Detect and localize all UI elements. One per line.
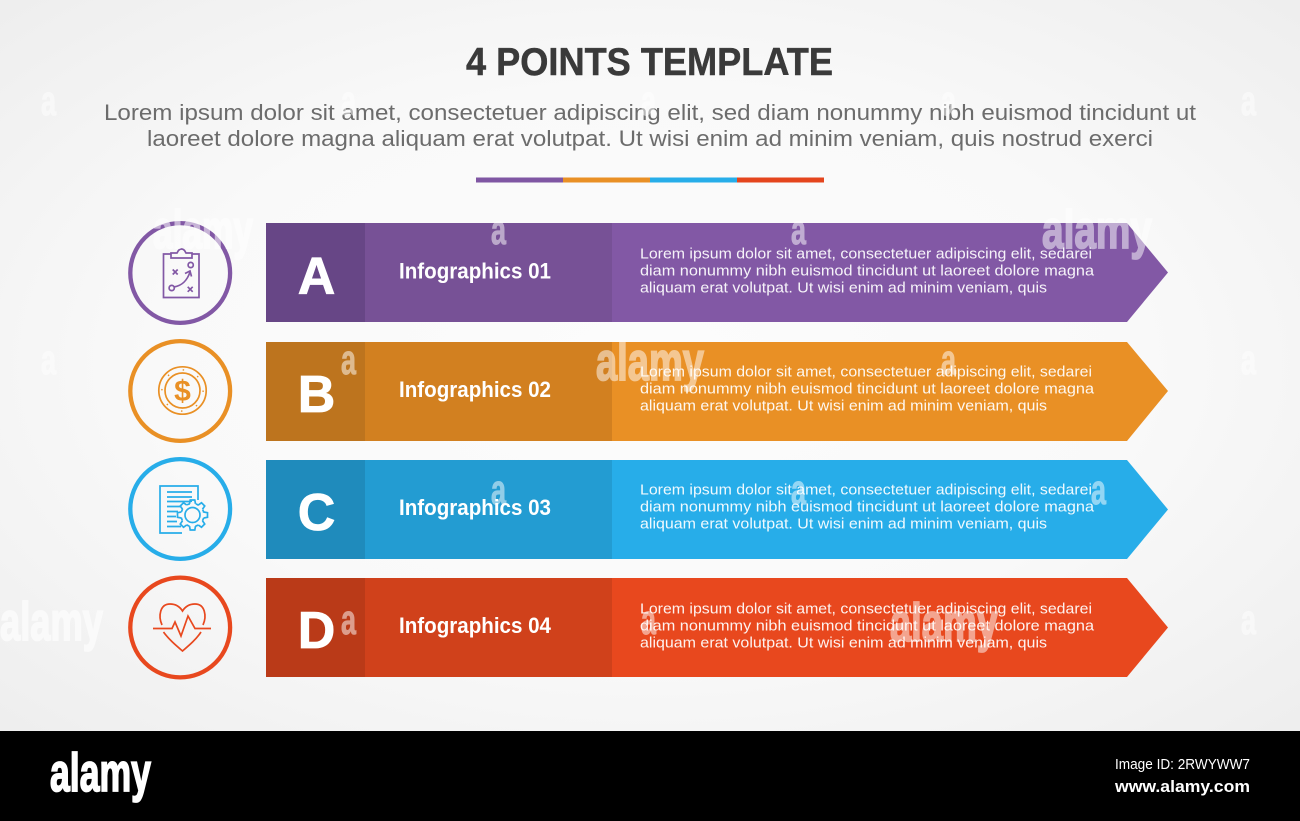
body text A: diam nonummy nibh euismod tincidunt ut laoreet dolore magna: [640, 262, 1095, 280]
panel: row D: [266, 578, 1168, 677]
heading C: Infographics 03: [399, 495, 551, 520]
label band D: [365, 578, 612, 677]
watermark overlay: a: [41, 336, 56, 383]
watermark overlay: alamy: [596, 332, 704, 392]
letter C: C: [298, 484, 335, 542]
intro text block: Lorem ipsum dolor sit amet, consectetuer adipiscing elit, sed diam nonummy nibh euismod tincidunt ut: [104, 100, 1196, 125]
letter tab C: [266, 460, 365, 559]
watermark overlay: a: [491, 206, 506, 253]
watermark overlay: a: [941, 336, 956, 383]
body text A: aliquam erat volutpat. Ut wisi enim ad minim veniam, quis: [640, 280, 1047, 296]
body text B: diam nonummy nibh euismod tincidunt ut laoreet dolore magna: [640, 380, 1095, 398]
icon circle: clipboard strategy: [130, 223, 230, 323]
body text C: Lorem ipsum dolor sit amet, consectetuer adipiscing elit, sedarei: [640, 482, 1092, 498]
title: 4 POINTS TEMPLATE: [466, 41, 833, 84]
body text B: Lorem ipsum dolor sit amet, consectetuer adipiscing elit, sedarei: [640, 364, 1092, 380]
letter tab B: [266, 342, 365, 441]
watermark overlay: a: [341, 77, 356, 124]
label band B: [365, 342, 612, 441]
heading D: Infographics 04: [399, 613, 552, 638]
watermark overlay: a: [791, 466, 806, 513]
watermark overlay: a: [1241, 336, 1256, 383]
label band A: [365, 223, 612, 322]
colour divider: [476, 178, 824, 182]
letter D: D: [298, 602, 335, 660]
body text D: Lorem ipsum dolor sit amet, consectetuer adipiscing elit, sedarei: [640, 600, 1092, 618]
body text A: [640, 246, 1095, 296]
watermark overlay: a: [941, 77, 956, 124]
body text D: aliquam erat volutpat. Ut wisi enim ad minim veniam, quis: [640, 634, 1047, 652]
heading A: Infographics 01: [399, 258, 551, 284]
icon circle: dollar coin: $: [174, 375, 191, 408]
watermark overlay: a: [641, 77, 656, 124]
footer bar: [0, 731, 1300, 821]
watermark overlay: a: [791, 206, 806, 253]
icon circle: document with gear: [130, 459, 230, 559]
body text C: diam nonummy nibh euismod tincidunt ut laoreet dolore magna: [640, 498, 1095, 516]
watermark overlay: a: [341, 596, 356, 643]
watermark overlay: a: [491, 466, 506, 513]
body text C: aliquam erat volutpat. Ut wisi enim ad minim veniam, quis: [640, 516, 1047, 532]
panel: row C: [266, 460, 1168, 559]
arrow bar A: [266, 223, 1168, 322]
footer logo: alamy: [50, 743, 151, 803]
letter tab D: [266, 578, 365, 677]
watermark overlay: a: [41, 77, 56, 124]
intro text block: [104, 100, 1196, 151]
heading B: Infographics 02: [399, 377, 551, 402]
image id: Image ID: 2RWYWW7: [1115, 756, 1250, 773]
letter B: B: [298, 366, 335, 424]
body text B: aliquam erat volutpat. Ut wisi enim ad minim veniam, quis: [640, 398, 1047, 414]
watermark overlay: a: [1241, 596, 1256, 643]
body text D: diam nonummy nibh euismod tincidunt ut laoreet dolore magna: [640, 618, 1095, 634]
panel: row A: [266, 223, 1168, 322]
watermark overlay: a: [1241, 77, 1256, 124]
website: www.alamy.com: [1114, 777, 1250, 796]
icon circle: dollar coin: [130, 341, 230, 441]
watermark overlay: a: [641, 596, 656, 643]
watermark overlay: [0, 77, 1256, 653]
body text B: [640, 364, 1095, 414]
body text A: Lorem ipsum dolor sit amet, consectetuer adipiscing elit, sedarei: [640, 246, 1092, 262]
watermark overlay: a: [1091, 466, 1106, 513]
arrow bar C: [266, 460, 1168, 559]
arrow bar B: [266, 342, 1168, 441]
letter A: A: [298, 248, 335, 306]
label band C: [365, 460, 612, 559]
watermark overlay: alamy: [153, 200, 253, 260]
arrow bar D: [266, 578, 1168, 677]
intro text block: laoreet dolore magna aliquam erat volutpat. Ut wisi enim ad minim veniam, quis nostrud exerci: [147, 126, 1153, 151]
icon circle: heart with pulse: [130, 578, 230, 677]
watermark overlay: a: [341, 336, 356, 383]
letter tab A: [266, 223, 365, 322]
body text C: [640, 482, 1095, 532]
body text D: [640, 600, 1095, 652]
watermark overlay: alamy: [890, 593, 998, 653]
panel: row B: [266, 342, 1168, 441]
watermark overlay: alamy: [1042, 200, 1152, 260]
watermark overlay: alamy: [0, 592, 103, 652]
